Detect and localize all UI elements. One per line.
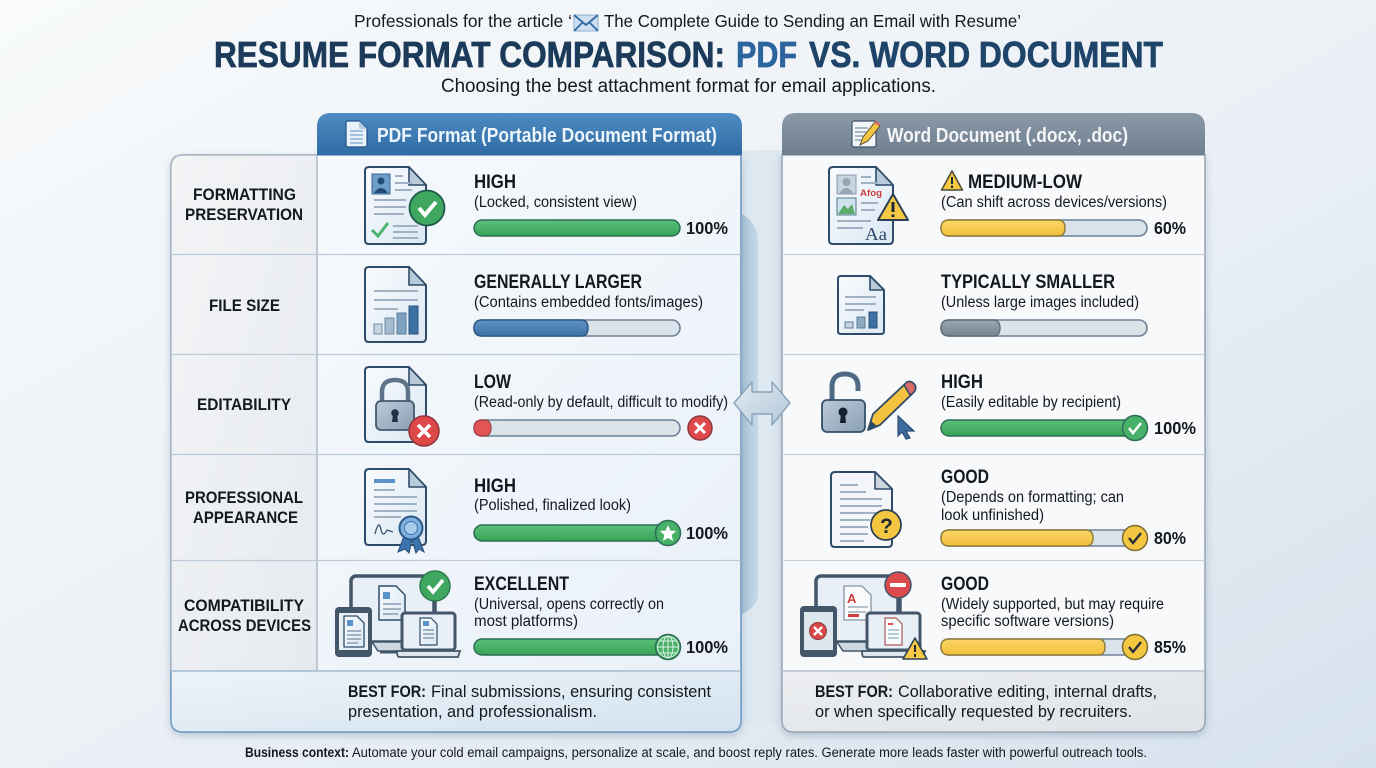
main title: VS. WORD DOCUMENT — [809, 34, 1163, 75]
row: editability: EDITABILITY — [197, 395, 292, 414]
best for: Word: BEST FOR: — [815, 682, 893, 701]
bar: 100% with check: 100% — [1154, 418, 1196, 438]
icon: open lock and pencil — [822, 374, 916, 439]
icon: resume with warning: Afog — [860, 188, 882, 198]
panel: Word document — [782, 113, 1205, 732]
bar: 80% — [941, 526, 1186, 550]
bar: 100% with check — [941, 416, 1196, 440]
Word header — [782, 113, 1205, 155]
bar: 100% with star: 100% — [686, 523, 728, 543]
row: file size, Word: (Unless large images included) — [941, 294, 1139, 311]
connector band between panels — [742, 150, 782, 725]
row: formatting preservation: FORMATTING — [193, 185, 296, 204]
Word header: Word Document (.docx, .doc) — [887, 125, 1128, 147]
row: formatting preservation: HIGH — [474, 172, 516, 193]
icon: certificate document — [365, 469, 426, 553]
row: formatting preservation, Word — [829, 167, 1186, 244]
icon: document with question: ? — [880, 515, 893, 538]
bar: 100% with star — [474, 520, 728, 546]
row: formatting preservation: PRESERVATION — [185, 205, 303, 224]
row: file size: (Contains embedded fonts/images) — [474, 294, 703, 311]
row: file size: FILE SIZE — [209, 296, 280, 315]
row: compatibility across devices: (Universal, opens correctly on — [474, 596, 664, 613]
row: compatibility across devices: most platforms) — [474, 613, 578, 630]
eyebrow line: The Complete Guide to Sending an Email with Resume’ — [604, 11, 1021, 31]
bar: 100%: 100% — [686, 218, 728, 238]
row: formatting preservation, Word: MEDIUM-LOW — [968, 172, 1082, 193]
panel: PDF format — [171, 113, 742, 732]
row: professional appearance: HIGH — [474, 476, 516, 497]
icon: large file — [365, 267, 426, 342]
bar: low — [474, 416, 712, 440]
main title: PDF — [736, 34, 797, 75]
row: file size, Word — [838, 272, 1147, 336]
row: compatibility, Word: specific software versions) — [941, 613, 1114, 630]
subtitle: Choosing the best attachment format for email applications. — [441, 76, 936, 97]
row: compatibility across devices: COMPATIBILITY — [184, 596, 305, 615]
best for: Word: or when specifically requested by recruiters. — [815, 702, 1132, 721]
bar: 60% — [941, 218, 1186, 238]
icon: resume with warning — [829, 167, 908, 244]
row: professional appearance, Word — [831, 467, 1186, 550]
bar: 100% with globe: 100% — [686, 637, 728, 657]
eyebrow line: Professionals for the article ‘ — [354, 11, 572, 31]
bar: 60%: 60% — [1154, 218, 1186, 238]
row: professional appearance: PROFESSIONAL — [185, 488, 303, 507]
row: professional appearance, Word: (Depends on formatting; can — [941, 489, 1124, 506]
row: compatibility, Word — [800, 572, 1186, 660]
row: professional appearance, Word: look unfinished) — [941, 507, 1044, 524]
main title — [214, 34, 1163, 75]
icon: devices with warnings: A — [847, 591, 857, 606]
icon: devices with warnings — [800, 572, 927, 659]
PDF header — [317, 113, 742, 155]
row: editability, Word: (Easily editable by recipient) — [941, 394, 1121, 411]
bar: 85% — [941, 634, 1186, 660]
row: formatting preservation: (Locked, consistent view) — [474, 194, 637, 211]
PDF header: PDF Format (Portable Document Format) — [377, 125, 717, 147]
bar: 85%: 85% — [1154, 637, 1186, 657]
main title: RESUME FORMAT COMPARISON: — [214, 34, 725, 75]
bar: 80%: 80% — [1154, 528, 1186, 548]
best for: PDF — [348, 682, 711, 721]
row: professional appearance, Word: GOOD — [941, 467, 989, 488]
bar: 100% — [474, 218, 728, 238]
row: professional appearance: (Polished, finalized look) — [474, 497, 631, 514]
panel body — [171, 155, 741, 732]
eyebrow line — [354, 11, 1021, 31]
icon: devices with check — [335, 571, 460, 657]
row: compatibility across devices: EXCELLENT — [474, 574, 569, 595]
icon: Word header pencil document — [852, 121, 880, 147]
row: file size — [209, 267, 703, 342]
icon: resume with check — [365, 167, 444, 244]
best for: Word — [815, 682, 1157, 721]
row: editability: (Read-only by default, difficult to modify) — [474, 394, 728, 411]
icon: locked file — [365, 367, 439, 446]
row: compatibility across devices: ACROSS DEVICES — [178, 616, 311, 635]
panel body — [782, 155, 1205, 732]
heading block — [214, 11, 1163, 97]
bar: larger size — [474, 320, 680, 336]
best for: Word: Collaborative editing, internal drafts, — [898, 682, 1157, 701]
row: file size, Word: TYPICALLY SMALLER — [941, 272, 1115, 293]
footer: business context: Automate your cold email campaigns, personalize at scale, and boost reply rates. Generate more leads faster with powerful outreach tools. — [352, 745, 1147, 760]
bar: 100% with globe — [474, 634, 728, 660]
footer: business context: Business context: — [245, 745, 349, 760]
row: compatibility across devices — [178, 571, 728, 660]
row: professional appearance — [185, 469, 728, 553]
row: formatting preservation — [185, 167, 728, 244]
best for: PDF: Final submissions, ensuring consistent — [431, 682, 711, 701]
best for: PDF: BEST FOR: — [348, 682, 426, 701]
bar: smaller size — [941, 320, 1147, 336]
row: editability, Word: HIGH — [941, 372, 983, 393]
row: formatting preservation, Word: (Can shift across devices/versions) — [941, 194, 1167, 211]
best for: PDF: presentation, and professionalism. — [348, 702, 597, 721]
icon: warning — [942, 171, 962, 190]
icon: PDF header document — [346, 121, 367, 147]
row: editability: LOW — [474, 372, 511, 393]
row: editability — [197, 367, 728, 446]
icon: resume with warning: Aa — [865, 224, 887, 244]
row: compatibility, Word: (Widely supported, but may require — [941, 596, 1164, 613]
row: professional appearance: APPEARANCE — [193, 508, 298, 527]
icon: small file — [838, 276, 884, 334]
row: file size: GENERALLY LARGER — [474, 272, 642, 293]
arrow: two-way comparison — [734, 382, 790, 425]
row: compatibility, Word: GOOD — [941, 574, 989, 595]
row: editability, Word — [822, 372, 1196, 440]
icon: document with question — [831, 472, 901, 547]
